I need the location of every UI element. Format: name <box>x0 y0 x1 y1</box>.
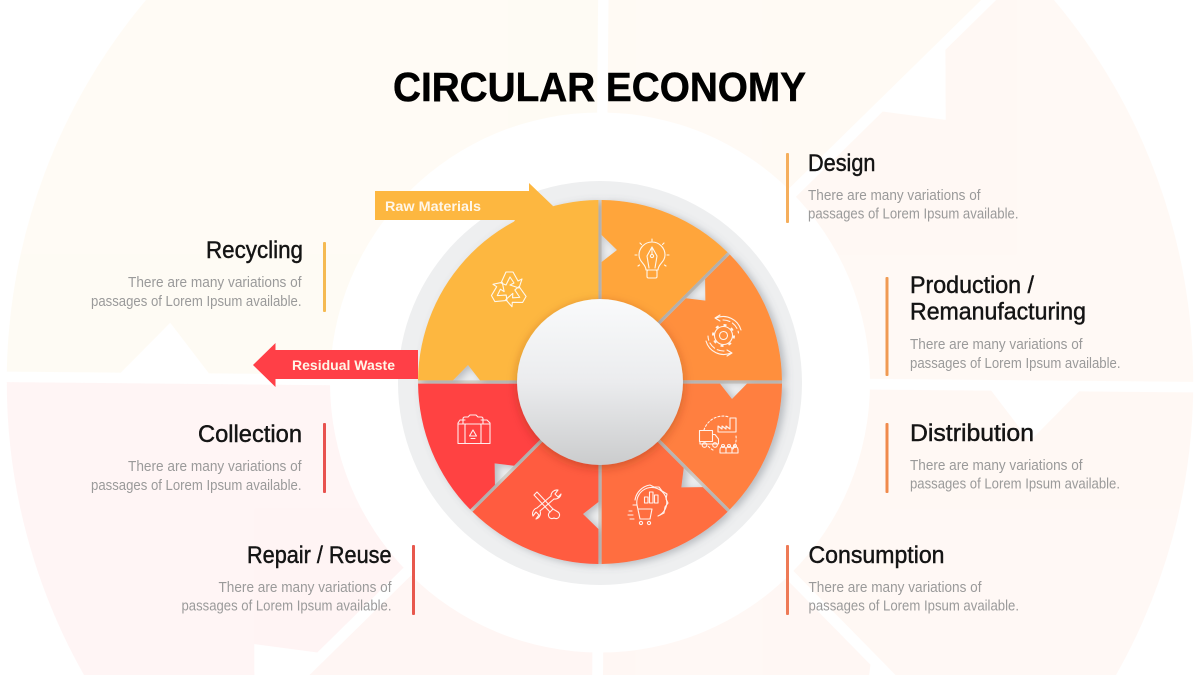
title: CIRCULAR ECONOMY <box>393 64 806 110</box>
icon: recycling bin <box>458 415 490 444</box>
arrow: raw materials <box>375 183 553 225</box>
segment: distribution <box>651 384 782 510</box>
heading: Design <box>808 150 876 177</box>
segment: design <box>602 200 728 331</box>
accent bar <box>786 545 789 615</box>
description: passages of Lorem Ipsum available. <box>910 356 1120 372</box>
icon: cart and gear <box>628 485 668 525</box>
description: There are many variations of <box>128 275 302 291</box>
heading: Collection <box>198 421 302 448</box>
arrow: residual waste: Residual Waste <box>292 358 396 373</box>
heading: Repair / Reuse <box>247 542 392 569</box>
description <box>808 580 1019 614</box>
description: passages of Lorem Ipsum available. <box>91 294 302 310</box>
description: passages of Lorem Ipsum available. <box>91 478 302 494</box>
segment separators <box>418 200 782 564</box>
icon: factory, truck and people <box>700 416 738 453</box>
description: passages of Lorem Ipsum available. <box>808 598 1019 614</box>
description <box>91 459 302 494</box>
description <box>182 580 392 614</box>
callout: Repair / Reuse <box>182 542 415 615</box>
circular diagram <box>253 181 819 601</box>
description: There are many variations of <box>218 580 392 596</box>
callout: Distribution <box>886 420 1120 493</box>
segment: repair <box>472 433 598 564</box>
outer gray ring <box>398 181 802 585</box>
accent bar <box>886 423 888 493</box>
accent bar <box>323 423 326 493</box>
accent bar <box>323 242 326 312</box>
callout: Consumption <box>786 542 1019 615</box>
segment: recycling <box>418 200 598 380</box>
callout: Design <box>786 150 1018 223</box>
description: passages of Lorem Ipsum available. <box>182 598 392 614</box>
icon: light bulb with pen nib <box>635 239 669 278</box>
heading: Consumption <box>808 542 944 569</box>
heading: Recycling <box>206 237 303 264</box>
description <box>91 275 302 310</box>
icon: gear with cycle arrows <box>706 315 741 356</box>
accent bar <box>786 153 789 223</box>
heading: Remanufacturing <box>910 298 1086 326</box>
description <box>910 458 1120 492</box>
accent bar <box>412 545 415 615</box>
description: passages of Lorem Ipsum available. <box>808 206 1018 222</box>
icon: recycle <box>487 272 529 310</box>
callout: Production / Remanufacturing <box>886 272 1120 376</box>
segment: production <box>637 254 819 436</box>
description: There are many variations of <box>910 458 1083 474</box>
arrow: residual waste <box>253 343 418 387</box>
description: passages of Lorem Ipsum available. <box>910 476 1120 492</box>
heading <box>910 272 1086 326</box>
segment: consumption <box>546 419 728 601</box>
description: There are many variations of <box>808 580 982 596</box>
callout: Recycling <box>91 237 326 312</box>
description <box>808 188 1018 222</box>
description <box>910 337 1120 372</box>
segment: collection <box>381 328 563 510</box>
center hub <box>517 299 683 465</box>
description: There are many variations of <box>910 337 1083 353</box>
heading: Production / <box>910 272 1034 299</box>
callout: Collection <box>91 421 326 494</box>
description: There are many variations of <box>128 459 302 475</box>
ring segments <box>381 200 819 601</box>
arrow: raw materials: Raw Materials <box>385 199 481 214</box>
description: There are many variations of <box>808 188 981 204</box>
heading: Distribution <box>910 420 1034 447</box>
icon: crossed wrench and screwdriver <box>533 490 561 519</box>
accent bar <box>886 277 888 376</box>
